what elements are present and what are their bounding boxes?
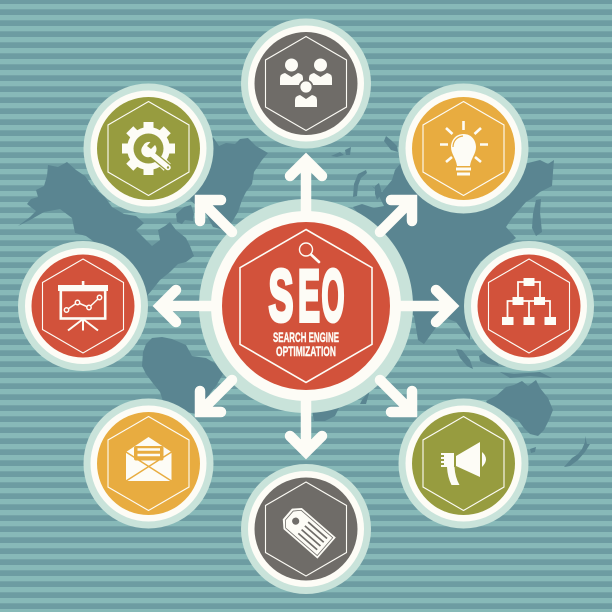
icon: megaphone (441, 442, 486, 485)
map: South America (142, 337, 223, 414)
SEO heading: S (268, 256, 294, 337)
map: Greenland and Arctic (190, 137, 268, 230)
icon: presentation board (58, 281, 108, 330)
SEO heading (268, 256, 344, 337)
icon: gear with wrench (122, 122, 175, 175)
arrow: right (380, 290, 452, 322)
badge hexagon (240, 230, 372, 382)
map: Africa edge (312, 390, 370, 421)
central SEO badge (211, 211, 401, 401)
node: presentation (18, 241, 148, 371)
SEO heading: E (298, 256, 320, 337)
map: Japan (532, 199, 542, 236)
map: Arctic island (176, 205, 194, 224)
world map silhouette (18, 130, 590, 467)
subtitle line 2: OPTIMIZATION (276, 343, 336, 359)
icon: magnifier (300, 243, 319, 262)
map: Tasmania (530, 447, 536, 453)
map: North America (18, 162, 194, 296)
map: Eurasia (353, 130, 554, 344)
node: marketing (398, 398, 528, 528)
central SEO badge: O (322, 256, 344, 337)
node: team (241, 18, 371, 148)
map: New Zealand (564, 436, 590, 467)
node: tag (241, 464, 371, 594)
central hub ring (199, 199, 413, 413)
arrows (160, 160, 452, 452)
icon: light bulb (440, 121, 488, 174)
map: Scandinavia and islands (331, 136, 398, 200)
icon: open envelope (126, 437, 172, 481)
arrow: down left (200, 380, 232, 412)
icon: price tag (278, 503, 336, 559)
subtitle line 1: SEARCH ENGINE (273, 329, 339, 345)
arrow: up left (200, 200, 232, 232)
icon: organization chart (502, 278, 556, 325)
arrow: down (290, 380, 322, 452)
arrow: up right (380, 200, 412, 232)
node: idea (398, 84, 528, 214)
map: Indonesia (456, 349, 552, 378)
map: Australia (486, 380, 553, 436)
node: settings (84, 84, 214, 214)
node: email (84, 398, 214, 528)
arrow: up (290, 160, 322, 230)
arrow: down right (380, 380, 412, 412)
node: hierarchy (464, 241, 594, 371)
icon: people (280, 58, 332, 107)
arrow: left (160, 290, 230, 322)
